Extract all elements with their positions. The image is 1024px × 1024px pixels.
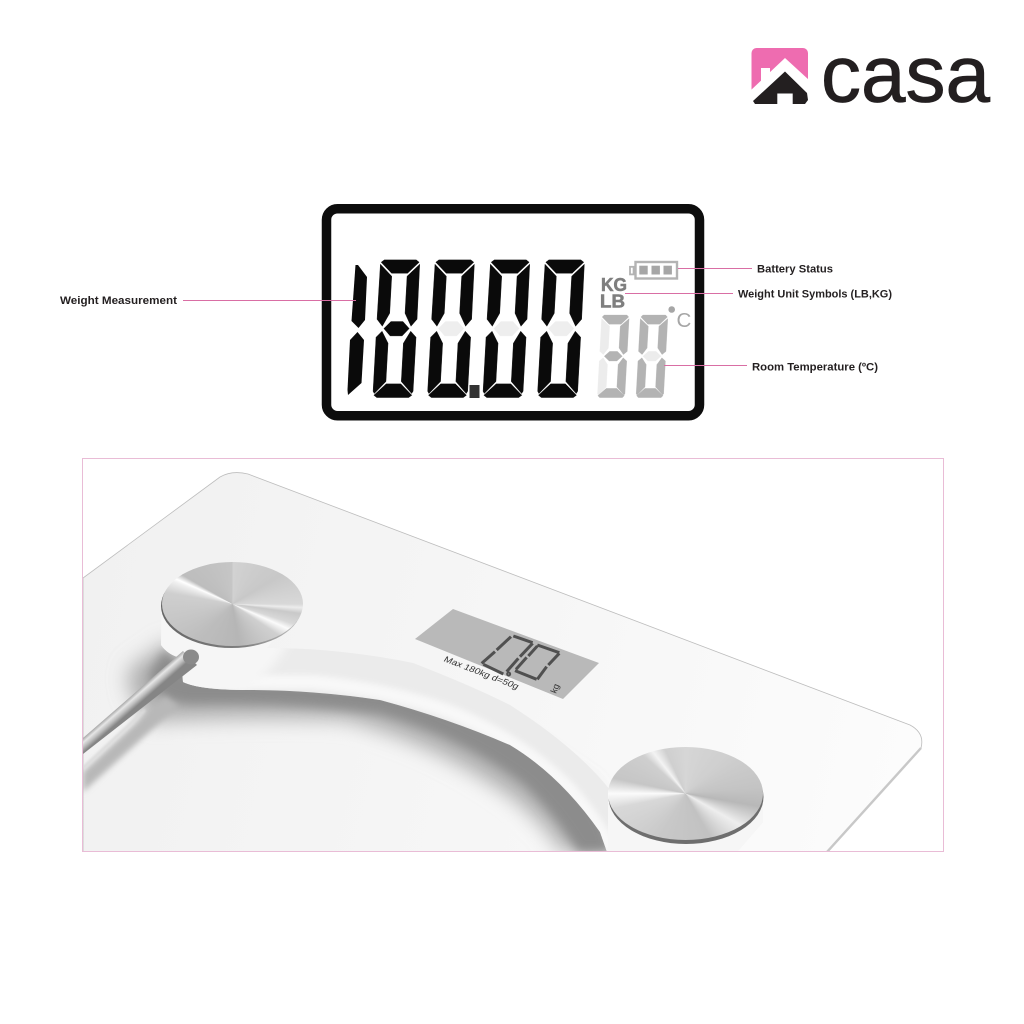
digit 0 [537, 260, 585, 398]
temperature digit 3 [597, 315, 629, 398]
metal rod [83, 651, 197, 754]
right foot wall [608, 790, 763, 852]
digit 8 [373, 260, 420, 398]
degree Celsius symbol [668, 306, 692, 332]
weight reading 180.00 [348, 260, 585, 398]
logo wordmark: casa [821, 30, 991, 118]
KG symbol: KG [601, 275, 627, 295]
body arc lower highlight [190, 680, 612, 852]
digit 1 [348, 265, 367, 395]
leader line: room temperature [664, 364, 747, 366]
LCD display diagram [60, 204, 892, 420]
glass plate [83, 473, 922, 852]
left metal button [162, 562, 303, 646]
leader line: weight measurement [183, 300, 356, 302]
battery icon [630, 262, 677, 278]
rod shadow [83, 696, 178, 792]
degree Celsius symbol: C [676, 309, 692, 332]
soft outer shadow under body [128, 640, 612, 852]
capacity text: Max 180kg d=50g [442, 654, 521, 691]
label: weight measurement: Weight Measurement [60, 295, 177, 307]
leader line: battery status [678, 268, 752, 270]
label: room temperature: Room Temperature (ºC) [752, 362, 878, 374]
left foot cylinder [161, 610, 280, 690]
rod socket [183, 650, 199, 664]
right button rim [608, 750, 764, 844]
dark contact shadow under body [150, 650, 612, 852]
digit 0 [427, 260, 475, 398]
temperature reading 30 [597, 315, 668, 398]
right metal button [608, 747, 763, 840]
scale illustration [83, 472, 922, 851]
LCD frame [326, 209, 700, 416]
leader line: weight unit symbols [625, 292, 733, 294]
plate lower-right edge highlight [827, 748, 921, 852]
temperature digit 0 [636, 315, 668, 398]
digit 0 [483, 260, 530, 398]
label: battery status: Battery Status [757, 264, 833, 276]
body arc front wall [161, 606, 763, 852]
panel: scale photo [82, 458, 944, 852]
rod reflection [83, 710, 145, 768]
LB symbol: LB [600, 292, 625, 312]
small LCD unit: kg [549, 682, 561, 695]
small LCD reading 0.0 [482, 636, 559, 679]
logo: casa [752, 30, 991, 118]
small LCD window [415, 609, 599, 699]
left button rim [161, 564, 302, 648]
logo icon: pink square with house [750, 48, 809, 108]
decimal point [470, 385, 480, 398]
label: weight unit symbols: Weight Unit Symbols (LB,KG) [738, 288, 892, 300]
